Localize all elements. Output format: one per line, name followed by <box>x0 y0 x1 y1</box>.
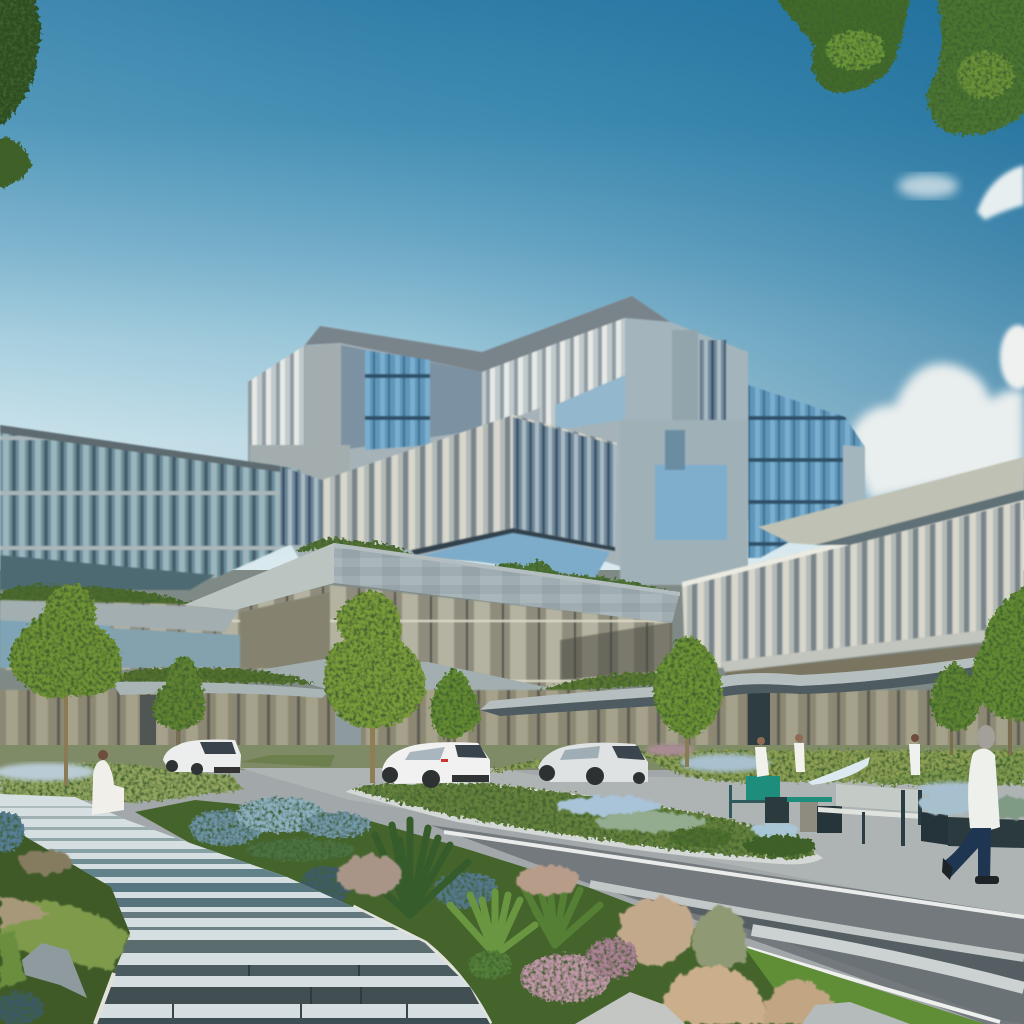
rear lawn and planting <box>0 744 1024 803</box>
planting island <box>346 783 823 864</box>
cars <box>163 740 648 788</box>
planter block <box>765 797 789 823</box>
tree canopy: top right <box>770 0 1024 135</box>
tree: left <box>9 584 122 785</box>
foreground rocks <box>575 992 910 1024</box>
person: staff rear 2 <box>794 734 805 772</box>
spiky plants <box>365 820 600 955</box>
bench and seating <box>729 776 1024 848</box>
tree: small centre <box>430 670 480 750</box>
planters <box>920 791 1024 848</box>
ground and driveway <box>0 745 1024 1024</box>
building: left wing <box>0 425 322 590</box>
car: centre <box>382 742 490 788</box>
building: terraces, berm and hedges <box>115 658 660 694</box>
person: walking doctor <box>942 725 1000 884</box>
tree: small left <box>152 657 205 750</box>
person: staff rear 3 <box>909 734 920 775</box>
foreground garden bed <box>135 800 985 1024</box>
walkway <box>0 790 520 1024</box>
road markings <box>444 832 1024 1022</box>
tree: centre <box>324 591 426 783</box>
building: podium stone slab <box>184 543 680 623</box>
building: right wing <box>682 457 1024 690</box>
building: entrance canopies <box>112 650 1024 716</box>
green chair <box>729 776 780 818</box>
table <box>787 797 842 833</box>
car: left <box>163 740 241 775</box>
building: finned middle block <box>322 415 617 578</box>
person: staff rear 1 <box>755 737 769 777</box>
car: right <box>538 743 648 785</box>
tree canopy: top left <box>0 0 40 192</box>
blue-grey shrubs <box>189 797 497 908</box>
people <box>92 725 1000 884</box>
ornamental grasses and pink shrub <box>338 855 836 1024</box>
building: lower podium glazing <box>0 585 672 690</box>
clouds <box>848 165 1024 500</box>
building: ground floor <box>0 685 1024 755</box>
left foreground planting <box>0 812 130 1024</box>
building backdrop <box>0 570 1024 755</box>
building: rear glass block <box>748 385 865 558</box>
rooftop planting <box>0 538 680 608</box>
trees: right edge <box>930 582 1024 755</box>
building: main tower <box>248 296 748 585</box>
bench <box>818 784 922 846</box>
person: seated left <box>92 750 124 815</box>
tree: right centre <box>653 636 722 767</box>
